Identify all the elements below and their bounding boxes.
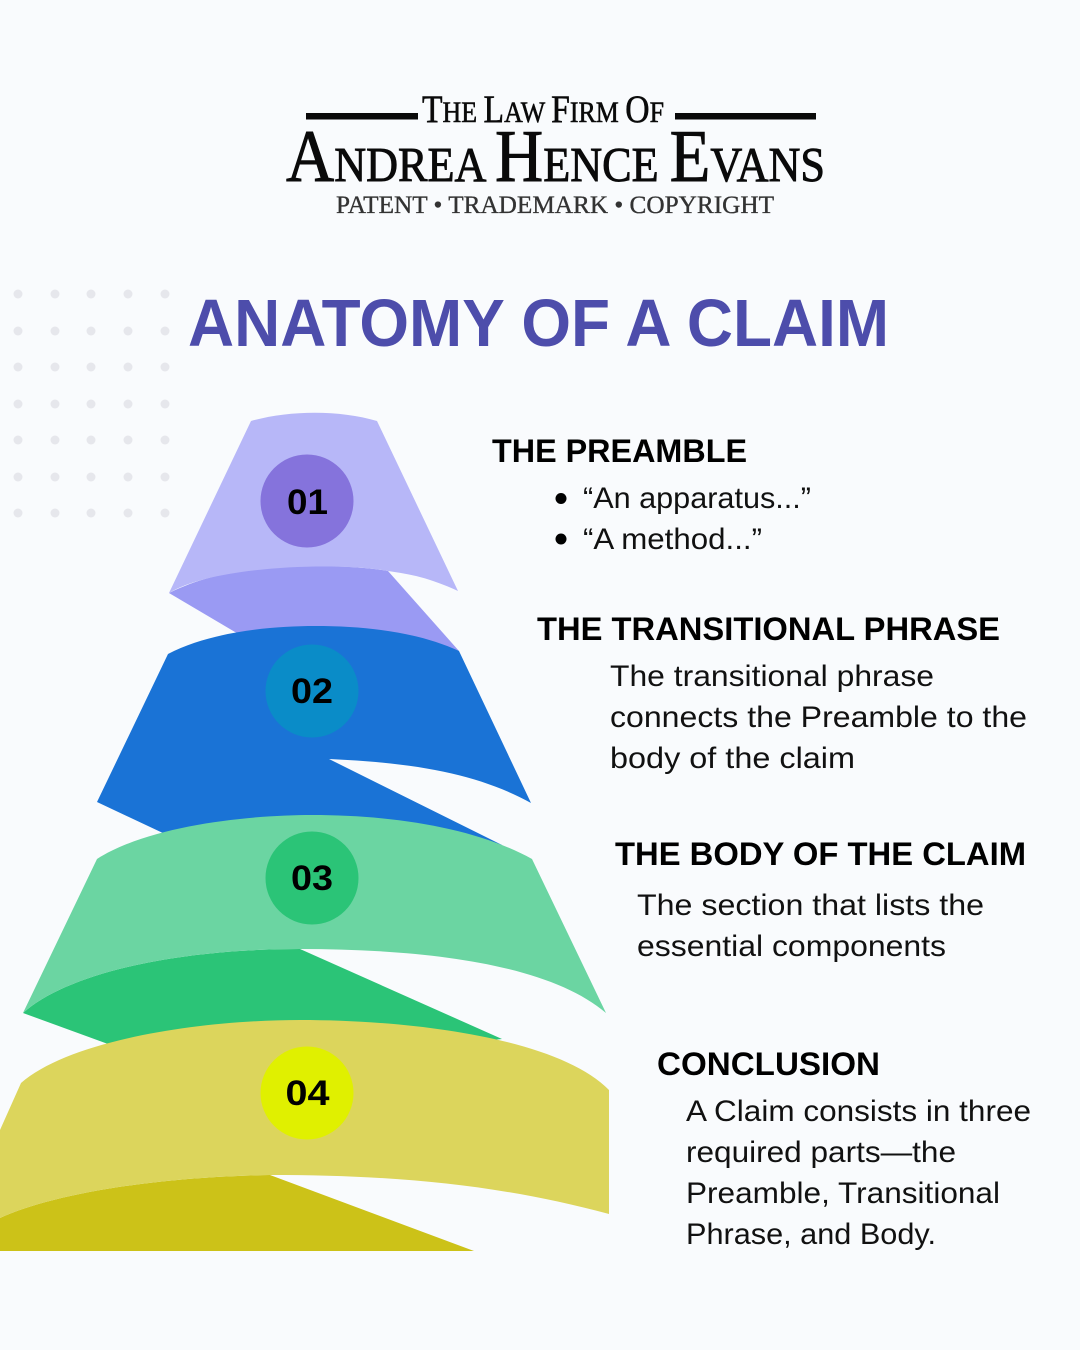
text block: the transitional phrase bbox=[537, 611, 1027, 775]
number badge 03 bbox=[266, 832, 358, 924]
number badge 02: 02 bbox=[291, 672, 333, 711]
number badge 01: 01 bbox=[287, 483, 328, 522]
number badge 03: 03 bbox=[291, 859, 333, 898]
text block: the body of the claim bbox=[615, 836, 1026, 963]
dot pattern bbox=[14, 290, 170, 518]
number badge 04: 04 bbox=[286, 1074, 330, 1113]
text block: the body of the claim: THE BODY OF THE CLAIM bbox=[615, 836, 1026, 872]
text block: conclusion: required parts—the bbox=[686, 1136, 956, 1169]
title: ANATOMY OF A CLAIM bbox=[188, 286, 889, 361]
number badge 01 bbox=[260, 454, 354, 548]
text block: the preamble: THE PREAMBLE bbox=[492, 433, 747, 469]
logo: The Law Firm of Andrea Hence Evans bbox=[286, 88, 825, 219]
tier 4: conclusion layer bbox=[0, 1020, 609, 1251]
logo: The Law Firm of Andrea Hence Evans: ANDREA HENCE EVANS bbox=[286, 116, 825, 198]
text block: the transitional phrase: The transitional phrase bbox=[610, 660, 934, 693]
text block: conclusion bbox=[657, 1046, 1031, 1251]
text block: the preamble bbox=[492, 433, 811, 556]
tier 1: preamble layer bbox=[169, 413, 459, 660]
text block: the body of the claim: The section that lists the bbox=[637, 889, 984, 922]
number badge 02 bbox=[266, 644, 358, 738]
text block: conclusion: Preamble, Transitional bbox=[686, 1177, 1000, 1210]
tier 3: body layer bbox=[23, 815, 606, 1060]
text block: conclusion: A Claim consists in three bbox=[686, 1095, 1031, 1128]
logo: The Law Firm of Andrea Hence Evans: PATENT • TRADEMARK • COPYRIGHT bbox=[336, 192, 774, 219]
text block: the transitional phrase: THE TRANSITIONAL PHRASE bbox=[537, 611, 1000, 647]
number badge 04 bbox=[260, 1046, 354, 1140]
text block: the preamble: “An apparatus...” bbox=[583, 482, 811, 515]
text block: conclusion: CONCLUSION bbox=[657, 1046, 880, 1082]
text block: conclusion: Phrase, and Body. bbox=[686, 1218, 936, 1251]
tier 2: transitional phrase layer bbox=[97, 626, 531, 845]
logo: The Law Firm of Andrea Hence Evans: THE LAW FIRM OF bbox=[422, 88, 664, 131]
text block: the body of the claim: essential components bbox=[637, 930, 946, 963]
text block: the transitional phrase: connects the Preamble to the bbox=[610, 701, 1027, 734]
text block: the preamble: “A method...” bbox=[583, 523, 762, 556]
text block: the transitional phrase: body of the claim bbox=[610, 742, 855, 775]
